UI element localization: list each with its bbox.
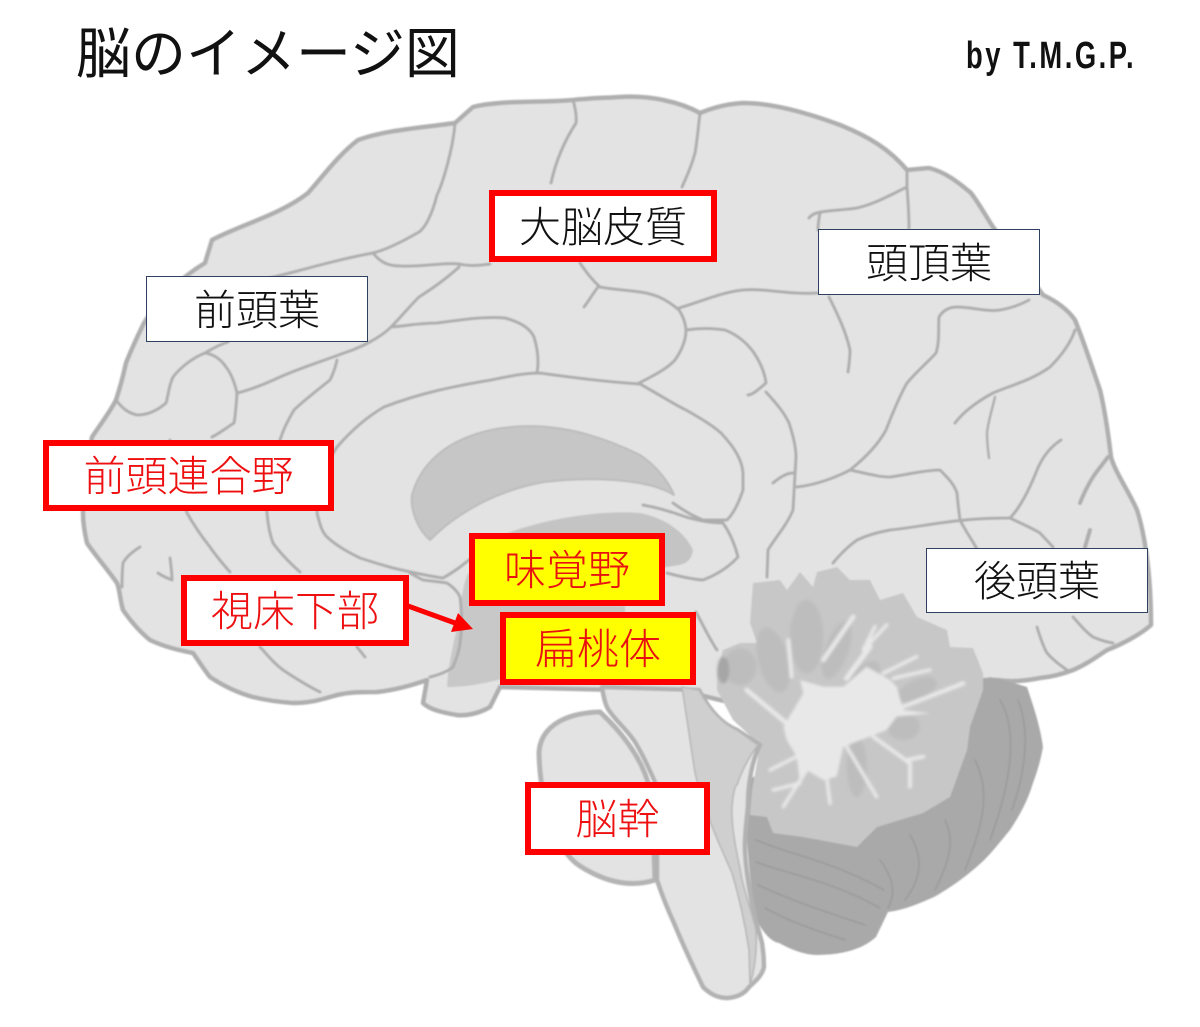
cerebellum — [717, 567, 1043, 955]
cerebrum outline — [83, 97, 1151, 720]
cerebellum mid lobes — [717, 567, 983, 847]
label: hypothalamus — [181, 575, 409, 646]
label: brainstem — [525, 782, 710, 855]
label: cerebral cortex — [489, 190, 717, 262]
cerebellum striations — [756, 700, 1025, 940]
cerebellum white matter — [747, 617, 963, 807]
label: parietal lobe: 頭頂葉 — [866, 240, 992, 286]
credit: by T.M.G.P. — [966, 35, 1136, 77]
pons — [539, 712, 655, 884]
title: 脳のイメージ図 — [76, 23, 460, 85]
label: occipital lobe: 後頭葉 — [974, 558, 1100, 605]
label: parietal lobe — [818, 229, 1040, 295]
label: prefrontal area — [43, 440, 334, 511]
label: hypothalamus: 視床下部 — [211, 588, 379, 635]
label: gustatory area — [469, 533, 665, 606]
label: amygdala — [500, 612, 696, 685]
label: frontal lobe: 前頭葉 — [194, 286, 320, 334]
label: brainstem: 脳幹 — [575, 796, 660, 843]
label: frontal lobe — [146, 276, 368, 342]
corpus callosum — [412, 426, 674, 540]
label: occipital lobe — [926, 548, 1148, 613]
sulci — [116, 100, 1113, 692]
label: prefrontal area: 前頭連合野 — [83, 453, 294, 500]
brainstem shaded band — [682, 687, 758, 985]
label: cerebral cortex: 大脳皮質 — [519, 204, 687, 250]
brainstem — [602, 687, 764, 998]
label: amygdala: 扁桃体 — [535, 626, 661, 673]
label: gustatory area: 味覚野 — [504, 547, 630, 594]
thalamus — [490, 512, 693, 572]
hypothalamus — [447, 573, 625, 687]
cerebellum dark cortex — [747, 677, 1043, 955]
cerebellum darker folia — [717, 600, 941, 797]
